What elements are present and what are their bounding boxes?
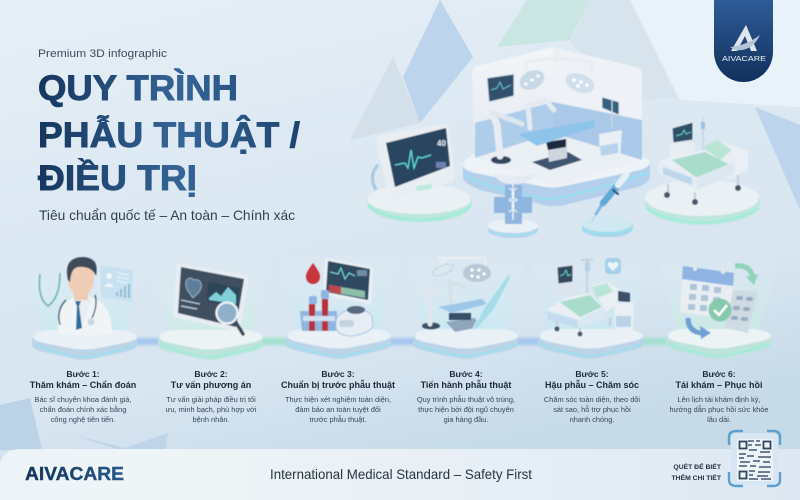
- step 4 robot arms: [422, 282, 465, 330]
- hero illustration: operating room: [463, 47, 650, 206]
- lab monitor: [323, 258, 373, 304]
- step 5 text: Chăm sóc toàn diện, theo dõi: [544, 395, 640, 404]
- step 6 text: Bước 6:: [702, 369, 736, 379]
- step 1 text: Bác sĩ chuyên khoa đánh giá,: [35, 395, 131, 404]
- calendar: [680, 259, 734, 320]
- footer brand: AIVACARE: [25, 463, 124, 484]
- scalpel: [472, 275, 510, 330]
- pill blister: [725, 290, 758, 333]
- step 6 text: Tái khám – Phục hồi: [675, 380, 763, 390]
- step 3 text: đảm bảo an toàn tuyệt đối: [295, 405, 381, 414]
- step 3 text: [281, 369, 395, 424]
- step 2 text: ưu, minh bạch, phù hợp với: [165, 405, 257, 414]
- step 4 text: Bước 4:: [449, 369, 483, 379]
- syringe: [592, 166, 634, 221]
- logo badge: AIVACARE: [722, 54, 766, 63]
- step 5 illustration: recovery bed: [538, 258, 643, 359]
- step 1 text: chẩn đoán chính xác bằng: [40, 405, 126, 414]
- step 4 table: [438, 299, 487, 332]
- step 5 text: sát sao, hỗ trợ phục hồi: [553, 405, 631, 414]
- step 6 text: lâu dài.: [707, 415, 731, 424]
- wall monitors: [487, 74, 619, 115]
- test tube rack: [300, 290, 337, 331]
- centrifuge: [336, 306, 373, 336]
- tablet: [173, 263, 249, 332]
- footer bar: [0, 449, 800, 500]
- caduceus wings and staff: [493, 172, 537, 220]
- step 2 illustration: tablet: [158, 263, 263, 360]
- room walls: [472, 47, 642, 186]
- step 4 text: gia hàng đầu.: [444, 415, 488, 424]
- step 6 text: hướng dẫn phục hồi sức khỏe: [670, 405, 768, 414]
- step 4 text: thực hiện bởi đội ngũ chuyên: [418, 405, 514, 414]
- footer tagline: International Medical Standard – Safety First: [270, 466, 532, 482]
- step 1 text: [30, 369, 136, 424]
- magnifier: [216, 302, 243, 334]
- glow beams: [22, 252, 780, 335]
- eyebrow label: Premium 3D infographic: [38, 48, 168, 60]
- step 3 platform: [286, 329, 391, 359]
- subtitle: Tiêu chuẩn quốc tế – An toàn – Chính xác: [39, 207, 295, 223]
- title: QUY TRÌNH: [38, 68, 238, 108]
- bed platform: [645, 180, 760, 225]
- title: [38, 68, 300, 198]
- step 5 text: nhanh chóng.: [570, 415, 614, 424]
- step 2 text: bệnh nhân.: [192, 415, 230, 424]
- step 4 illustration: surgery: [413, 258, 518, 359]
- platform: operating room base: [463, 152, 650, 206]
- hero illustration: caduceus cross: [488, 172, 538, 238]
- step 6 platform: [666, 329, 771, 359]
- step 6 text: Lên lịch tái khám định kỳ,: [678, 395, 760, 404]
- step 1 illustration: doctor: [32, 257, 137, 360]
- doctor figure: [58, 257, 112, 336]
- process connector band: [125, 338, 678, 345]
- step 3 text: Chuẩn bị trước phẫu thuật: [281, 380, 395, 390]
- step 6 illustration: calendar and pills: [666, 259, 771, 359]
- QR caption: QUÉT ĐỂ BIẾT: [673, 461, 722, 471]
- surgical lamps: [516, 50, 597, 97]
- monitor platform: [367, 184, 472, 222]
- step 4 lamps: [431, 258, 491, 282]
- step 1 text: Thăm khám – Chẩn đoán: [30, 380, 136, 390]
- heart bubble: [605, 258, 621, 274]
- blood drop: [306, 263, 320, 284]
- side cart: [614, 291, 634, 333]
- step 5 text: Bước 5:: [575, 369, 609, 379]
- IV and monitor: [555, 258, 593, 295]
- cycle arrows: [688, 266, 758, 339]
- title: ĐIỀU TRỊ: [38, 158, 197, 198]
- step 3 text: Bước 3:: [321, 369, 355, 379]
- bedside monitor and IV: [670, 117, 705, 165]
- step 1 text: Bước 1:: [66, 369, 100, 379]
- step 1 text: công nghệ tiên tiến.: [51, 415, 115, 424]
- step 3 text: Thực hiện xét nghiệm toàn diện,: [285, 395, 391, 404]
- QR caption: THÊM CHI TIẾT: [672, 472, 722, 482]
- blue cross: [494, 185, 532, 224]
- step 4 text: Tiến hành phẫu thuật: [421, 380, 511, 390]
- step 5 text: [544, 369, 640, 424]
- bed: [658, 140, 748, 205]
- hero illustration: patient monitor: [367, 124, 472, 222]
- operating table: [518, 120, 595, 170]
- logo badge: [714, 0, 773, 82]
- step 4 text: [417, 369, 515, 424]
- step 2 text: Bước 2:: [194, 369, 228, 379]
- title: PHẪU THUẬT /: [38, 115, 300, 155]
- QR caption: [672, 461, 722, 482]
- step 5 text: Hậu phẫu – Chăm sóc: [545, 380, 639, 390]
- equipment cart: [599, 100, 622, 163]
- hero illustration: syringe: [582, 166, 634, 237]
- robot arms: [491, 100, 554, 164]
- step 1 platform: [32, 330, 137, 360]
- check badge: [708, 298, 732, 322]
- step 4 text: Quy trình phẫu thuật vô trùng,: [417, 395, 515, 404]
- hero illustration: hospital bed: [645, 117, 760, 225]
- step 2 platform: [158, 330, 263, 360]
- monitor body: 40: [437, 139, 446, 148]
- syringe platform: [582, 216, 633, 237]
- step 2 text: Tư vấn giải pháp điều trị tối: [166, 395, 256, 404]
- recovery bed: [547, 282, 618, 336]
- QR code: [729, 431, 780, 486]
- cross platform: [488, 219, 538, 238]
- stethoscope: [39, 273, 60, 306]
- step 6 text: [670, 369, 768, 424]
- patient card: [100, 265, 133, 302]
- step 4 platform: [413, 329, 518, 359]
- step 5 platform: [538, 329, 643, 359]
- step 3 illustration: lab tests: [286, 258, 391, 359]
- step 2 text: [165, 369, 257, 424]
- step 2 text: Tư vấn phương án: [171, 380, 251, 390]
- step 3 text: trước phẫu thuật.: [309, 415, 367, 424]
